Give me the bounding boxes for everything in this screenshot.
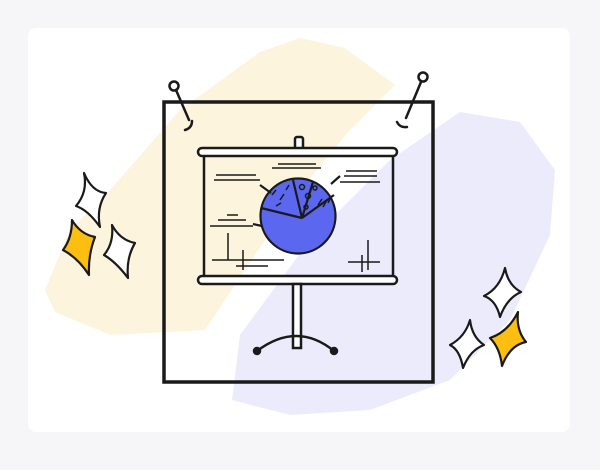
screen xyxy=(198,137,397,354)
brush: yellow xyxy=(45,38,395,335)
board frame xyxy=(164,102,433,382)
chart labels xyxy=(210,164,380,272)
card background xyxy=(28,28,570,432)
pins xyxy=(170,72,428,130)
pie chart xyxy=(253,176,340,254)
sparkles left xyxy=(63,173,135,278)
brush: lavender xyxy=(232,112,555,415)
sparkles right xyxy=(450,268,526,368)
